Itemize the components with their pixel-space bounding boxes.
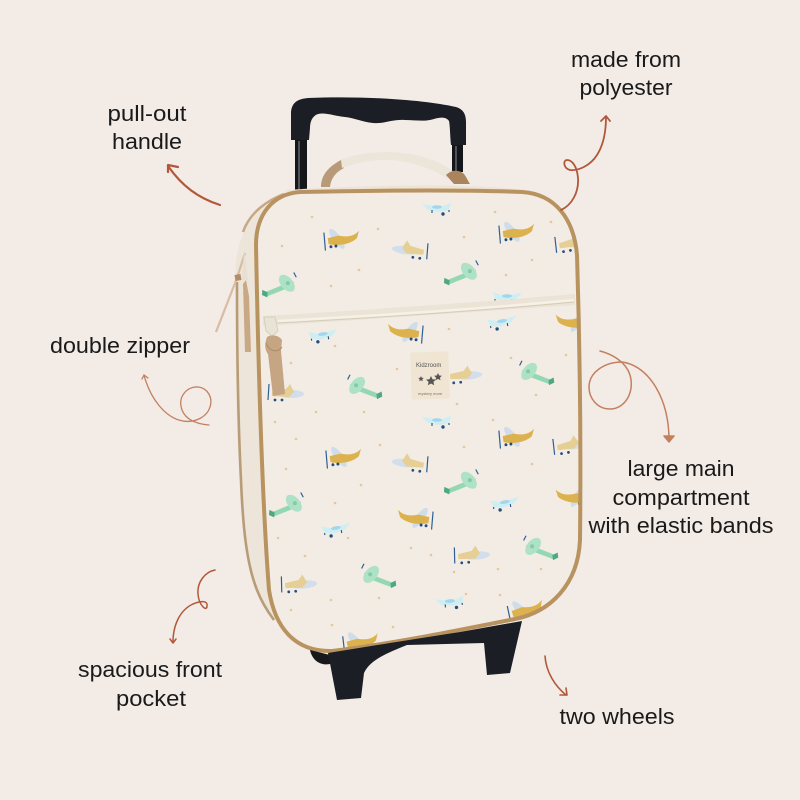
arrow: pull-out handle [168, 165, 220, 205]
side panel [236, 192, 300, 622]
arrow: large main compartment [589, 351, 674, 442]
label: large main compartment: with elastic bands [587, 513, 774, 538]
arrow: two wheels [545, 656, 567, 695]
label: spacious front pocket: spacious front [78, 657, 222, 682]
label: double zipper: double zipper [50, 333, 190, 358]
double zipper pulls [216, 250, 251, 352]
pull-out handle [291, 97, 466, 194]
front trim [256, 190, 580, 651]
arrow: spacious front pocket [170, 570, 215, 643]
label: large main compartment [587, 456, 774, 538]
label: spacious front pocket [78, 657, 222, 711]
aeroplane pattern [260, 203, 592, 657]
label: large main compartment: large main [628, 456, 734, 481]
front pocket zipper [263, 294, 575, 336]
wheels [310, 621, 522, 700]
label: made from polyester: polyester [580, 75, 672, 100]
label: two wheels: two wheels [560, 704, 674, 729]
brand label [410, 351, 450, 400]
label: spacious front pocket: pocket [116, 686, 186, 711]
arrow: made from polyester [561, 116, 610, 210]
brand label: Kidzroom [416, 363, 441, 369]
arrow: double zipper [142, 375, 211, 425]
label: pull-out handle: pull-out [108, 101, 186, 126]
label: made from polyester: made from [571, 47, 681, 72]
brand label: mystery more [418, 391, 443, 396]
label: large main compartment: compartment [612, 485, 750, 510]
label: pull-out handle: handle [112, 129, 182, 154]
suitcase [216, 97, 592, 700]
front panel [256, 190, 580, 651]
label: pull-out handle [108, 101, 186, 154]
zipper pull: front [265, 335, 285, 396]
carry handle [321, 152, 470, 187]
label: made from polyester [571, 47, 681, 100]
